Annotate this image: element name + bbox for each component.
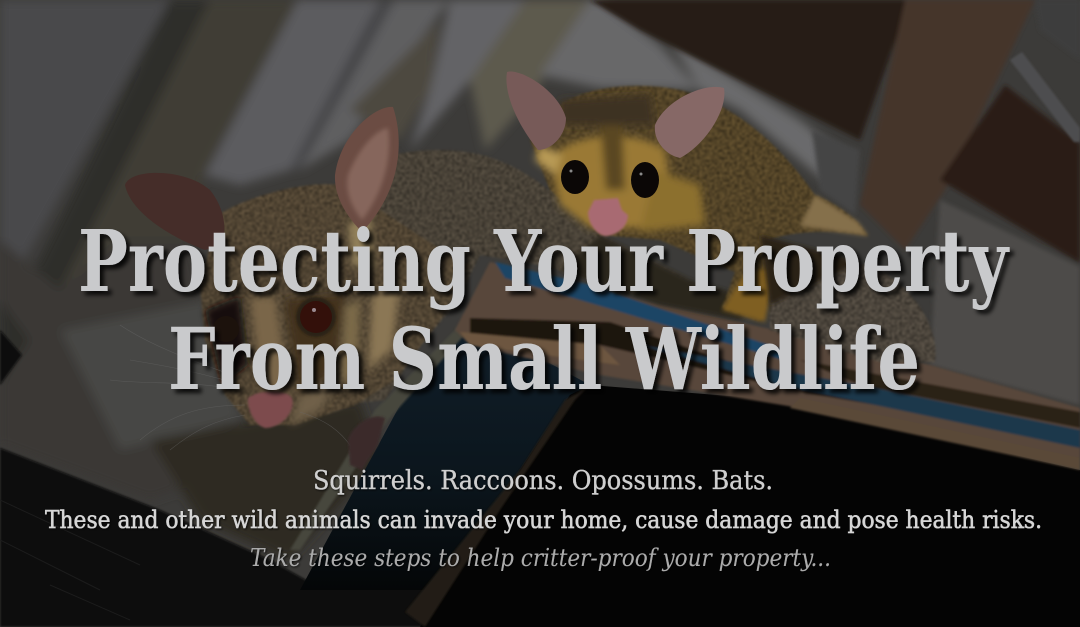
large possum eyes, nose and paw	[213, 297, 385, 470]
bottom-left wood lines	[0, 500, 140, 620]
small possum body	[530, 86, 868, 322]
small possum face	[535, 95, 705, 232]
large possum face markings	[205, 210, 400, 425]
wall stripes	[0, 0, 850, 560]
beams at upper right	[590, 0, 1080, 405]
small possum ears	[506, 72, 724, 158]
large possum body	[200, 150, 936, 425]
intro text: Take these steps to help critter-proof your property...	[250, 544, 831, 572]
metal rail	[1010, 52, 1080, 142]
lower dark area	[0, 315, 1080, 627]
small possum eyes and nose	[561, 160, 659, 236]
large possum ears	[125, 107, 399, 250]
large possum whiskers	[110, 325, 352, 450]
intro text	[45, 466, 1042, 572]
folded stack of cardboard and stripes	[455, 262, 1080, 470]
title	[78, 212, 1010, 410]
intro text: Squirrels. Raccoons. Opossums. Bats.	[313, 466, 773, 496]
